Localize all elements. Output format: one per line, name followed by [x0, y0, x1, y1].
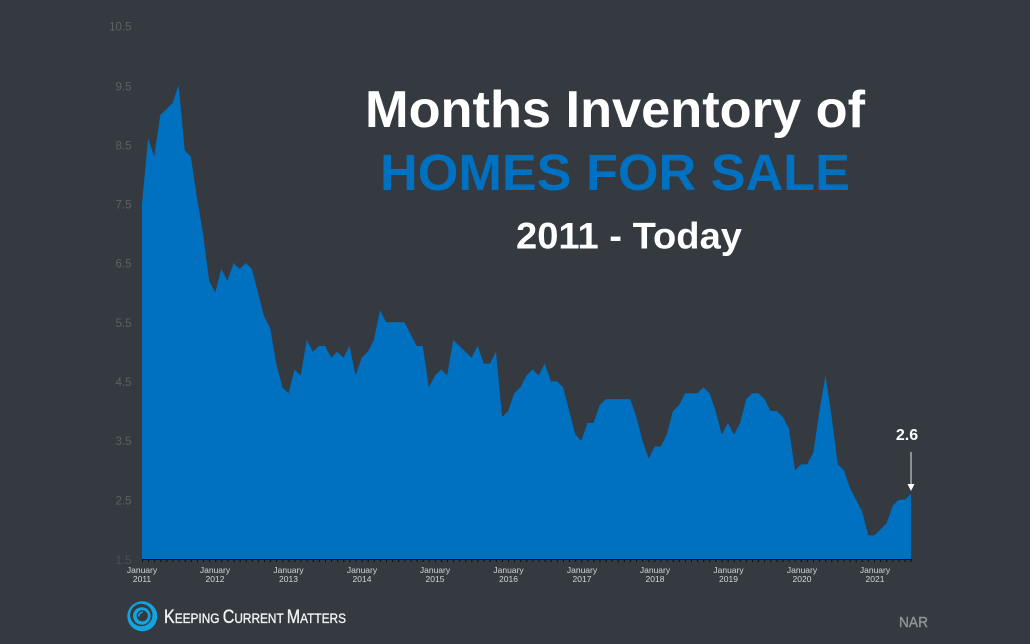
title line: date range: 2011 - Today: [516, 216, 742, 256]
x axis labels: January: [787, 565, 818, 575]
area chart: months of inventory: [142, 85, 911, 559]
x axis labels: January: [347, 565, 378, 575]
y axis labels: 5.5: [116, 318, 132, 330]
x axis labels: 2015: [426, 574, 445, 584]
x axis labels: January: [420, 565, 451, 575]
callout: latest value 2.6: 2.6: [896, 427, 918, 444]
x axis line with ticks: [142, 559, 912, 562]
y axis labels: [109, 22, 132, 567]
icon: spiral: [127, 601, 157, 631]
x axis labels: January: [567, 565, 598, 575]
title line: HOMES FOR SALE: HOMES FOR SALE: [380, 144, 850, 201]
x axis labels: January: [640, 565, 671, 575]
y axis labels: 1.5: [116, 555, 132, 567]
y axis labels: 9.5: [116, 82, 132, 94]
x axis labels: [127, 565, 891, 584]
x axis labels: 2017: [573, 574, 592, 584]
logo wordmark: KEEPING CURRENT MATTERS: [164, 607, 346, 628]
x axis labels: January: [713, 565, 744, 575]
x axis labels: 2021: [866, 574, 885, 584]
y axis labels: 8.5: [116, 140, 132, 152]
y axis labels: 10.5: [109, 22, 132, 34]
y axis labels: 6.5: [116, 258, 132, 270]
logo: Keeping Current Matters: [127, 601, 346, 631]
x axis labels: 2013: [279, 574, 298, 584]
y axis labels: 2.5: [116, 496, 132, 508]
x axis labels: 2014: [353, 574, 372, 584]
x axis labels: 2018: [646, 574, 665, 584]
x axis labels: 2019: [719, 574, 738, 584]
x axis labels: January: [860, 565, 891, 575]
x axis labels: January: [493, 565, 524, 575]
source: NAR: NAR: [899, 614, 928, 631]
x axis labels: 2011: [133, 574, 151, 584]
y axis labels: 4.5: [116, 377, 132, 389]
title line: Months Inventory of: Months Inventory of: [365, 81, 866, 139]
x axis labels: 2020: [793, 574, 812, 584]
x axis labels: January: [127, 565, 158, 575]
x axis labels: 2012: [206, 574, 225, 584]
arrow: points to last data value: [908, 452, 914, 491]
title: [365, 81, 866, 256]
x axis labels: January: [273, 565, 304, 575]
x axis labels: 2016: [499, 574, 518, 584]
x axis labels: January: [200, 565, 231, 575]
y axis labels: 3.5: [116, 436, 132, 448]
callout: latest value 2.6: [896, 427, 918, 491]
y axis labels: 7.5: [116, 200, 132, 212]
